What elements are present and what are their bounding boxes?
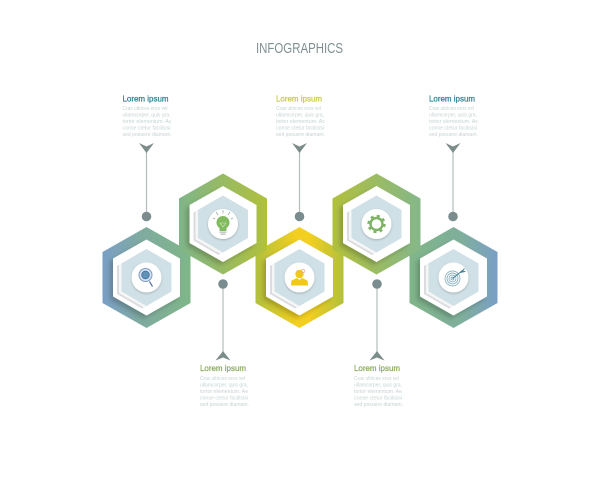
text block 5: Lorem ipsum [429,94,475,104]
text block 3: Lorem ipsum [276,94,322,104]
text block 3: ullamcorper, quis gra, [276,112,324,118]
text block 5: Cras ultrices eros vel [429,106,474,112]
step 5 hexagon with target icon [420,240,487,316]
text block 1: Lorem ipsum [122,94,168,104]
text block 2: sed posuere diamam. [200,402,249,408]
text block 4: ullamcorper, quis gra, [354,382,402,388]
icon: gear [368,216,384,232]
text block 5 [429,94,478,138]
text block 2 [200,363,249,408]
text block 4: Lorem ipsum [354,363,400,373]
hexagon ring 4 [332,174,420,274]
text block 1 [122,94,172,138]
connector 5 with arrow and dot [446,143,460,221]
text block 2: ullamcorper, quis gra, [200,382,248,388]
text block 1: sed posuere diamam. [122,132,172,138]
hexagon ring 5 [410,227,498,328]
text block 5: ullamcorper, quis gra, [429,112,477,118]
text block 1: tortor elementum. Ac [122,119,172,125]
title: INFOGRAPHICS [256,41,343,57]
text block 4: Cras ultrices eros vel [354,376,399,382]
text block 1: ullamcorper, quis gra, [122,112,171,118]
icon: light bulb [213,210,233,235]
icon: target [445,268,466,286]
text block 5: sed posuere diamam. [429,132,478,138]
text block 2: Cras ultrices eros vel [200,376,245,382]
text block 4: sed posuere diamam. [354,402,403,408]
text block 3: tortor elementum. Ac [276,119,325,125]
text block 2: conse ctetur facilisisi [200,396,248,402]
text block 3 [276,94,325,138]
text block 4: tortor elementum. Ae [354,389,402,395]
hexagon ring 3 [256,227,344,328]
text block 3: sed posuere diamam. [276,132,325,138]
text block 2: Lorem ipsum [200,363,246,373]
step 3 hexagon with person icon [266,240,333,316]
text block 3: Cras ultrices eros vel [276,106,321,112]
text block 2: tortor elementum. Ae [200,389,248,395]
text block 1: conse ctetur facilisisi [122,126,170,132]
text block 4 [354,363,403,408]
connector 2 with arrow and dot [216,279,230,360]
step 4 hexagon with gear icon [343,186,410,262]
hexagon ring 1 [102,227,190,328]
step 1 hexagon with search icon [113,240,180,316]
connector 3 with arrow and dot [292,143,307,221]
step 2 hexagon with light bulb icon [190,186,256,262]
icon: person [291,269,308,286]
text block 5: conse ctetur facilisisi [429,126,477,132]
connector 4 with arrow and dot [370,279,384,360]
hexagon ring 2 [179,174,267,274]
text block 1: Cras ultrices eros vel [122,106,168,112]
text block 3: conse ctetur facilisisi [276,126,324,132]
text block 4: conse ctetur facilisisi [354,396,402,402]
connector 1 with arrow and dot [139,143,154,221]
icon: magnifying glass [139,268,152,286]
text block 5: tortor elementum. Ac [429,119,478,125]
